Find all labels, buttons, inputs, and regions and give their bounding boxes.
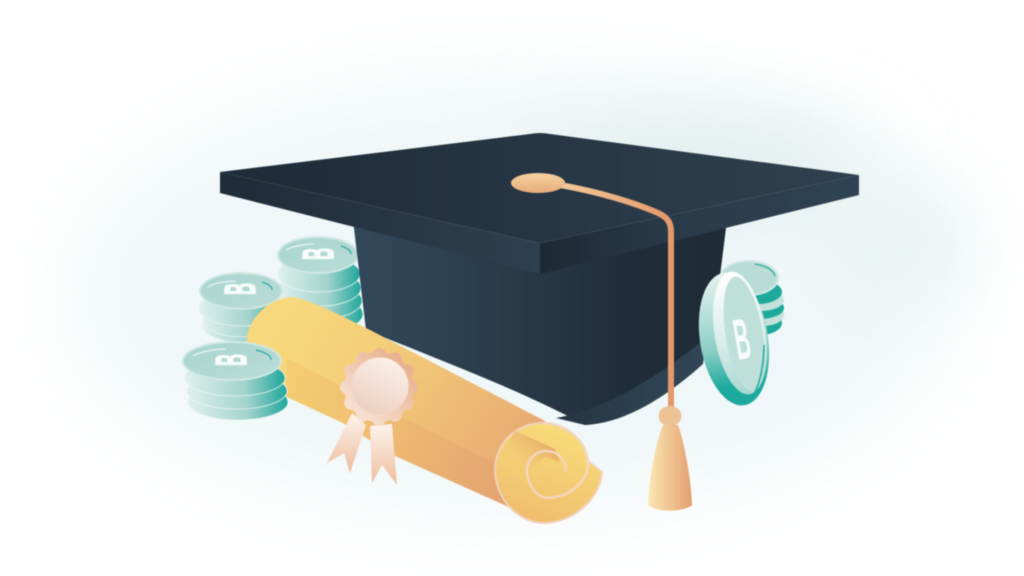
coin stack: front left xyxy=(182,341,288,420)
rosette ribbons xyxy=(327,413,397,485)
coin stack: front left: B xyxy=(208,354,257,366)
front coin: B xyxy=(729,308,755,373)
cap lower band xyxy=(556,338,706,425)
tassel fringe xyxy=(648,425,692,511)
coin stack: middle xyxy=(199,272,283,342)
coin stack: right xyxy=(719,260,784,335)
diploma scroll xyxy=(247,297,602,523)
coin stack: middle: B xyxy=(217,283,266,295)
cap board top xyxy=(220,133,859,243)
scroll body xyxy=(247,297,545,515)
front coin xyxy=(690,268,778,410)
cap body xyxy=(353,220,727,425)
tassel xyxy=(511,173,692,511)
scroll spiral xyxy=(527,423,588,498)
scroll roll end xyxy=(495,423,602,523)
rosette seal xyxy=(344,352,414,422)
cap board thickness xyxy=(220,172,859,274)
coin stack: back: B xyxy=(295,248,344,260)
coin stack: back xyxy=(277,236,363,332)
scroll lower fold xyxy=(287,358,525,516)
tassel knob xyxy=(658,406,682,426)
cap button xyxy=(511,173,565,193)
tassel cord xyxy=(560,185,671,410)
